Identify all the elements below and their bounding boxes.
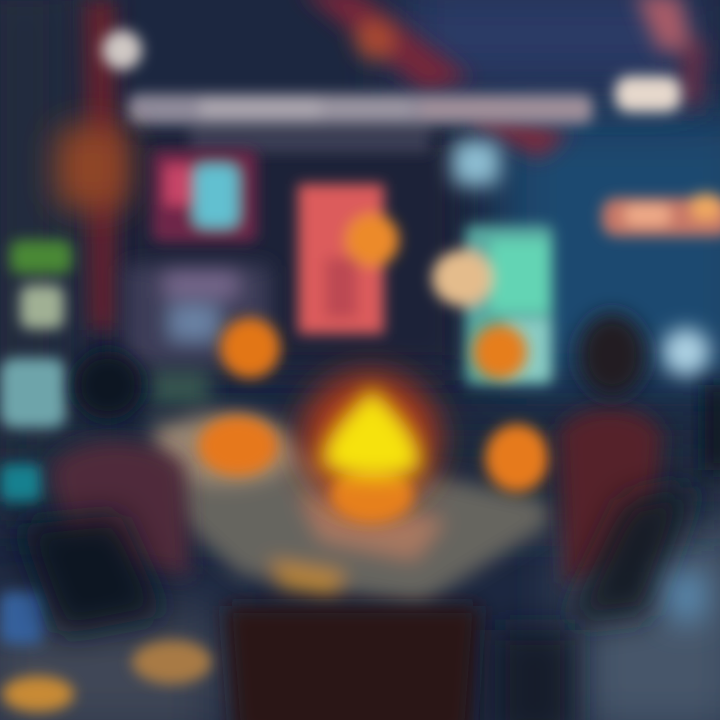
- screen: central coral poster: [298, 184, 399, 334]
- screens: small muted panels left of centre: [125, 265, 270, 404]
- table: dim grey surface with warm objects: [150, 412, 550, 605]
- sign: blurred banner heading: [102, 30, 681, 152]
- icons: stacked column at far left: [0, 240, 212, 712]
- table base: dark red-brown pedestal: [225, 606, 480, 720]
- screen: pink and cyan panel: [152, 150, 257, 242]
- centrepiece: glowing yellow flame: [300, 372, 440, 523]
- icon: pale blue tile: [452, 140, 710, 376]
- sign: glowing orange and pink label, right wall: [602, 194, 720, 236]
- orbs: orange glowing spheres: [198, 318, 549, 492]
- figure: seated person at left: [20, 351, 190, 635]
- figure: seated person at right: [558, 313, 720, 625]
- floor: pale blue glow at lower right: [495, 572, 704, 720]
- lantern: orange glow at upper left: [55, 125, 130, 210]
- ceiling beams: red diagonal struts: [84, 0, 705, 330]
- screen: green and mint panel: [432, 225, 553, 385]
